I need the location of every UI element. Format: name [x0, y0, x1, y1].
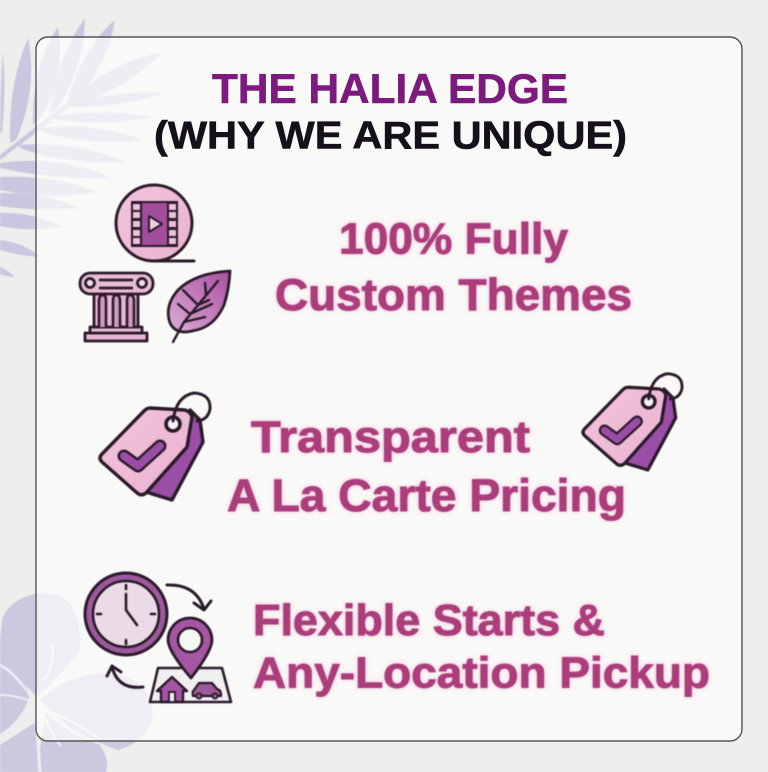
text: flexible starts: Any-Location Pickup	[253, 650, 710, 698]
text: flexible starts	[253, 596, 710, 698]
arrow: map to clock	[107, 666, 143, 687]
palm leaf decoration	[0, 18, 165, 277]
icon: price tag left	[100, 393, 210, 500]
heading: brand: THE HALIA EDGE	[212, 65, 568, 112]
arrow: clock to pin	[167, 585, 211, 610]
heading: subtitle: (WHY WE ARE UNIQUE)	[154, 114, 627, 158]
film reel	[116, 185, 194, 261]
text: pricing	[227, 413, 626, 521]
icon: price tag right	[583, 374, 682, 470]
text: custom themes: 100% Fully	[339, 214, 569, 264]
map	[150, 668, 231, 702]
text: pricing: A La Carte Pricing	[227, 470, 626, 521]
clock	[85, 573, 167, 655]
leaf	[168, 271, 230, 342]
map pin	[168, 618, 212, 678]
column	[80, 273, 153, 341]
text: custom themes	[275, 214, 632, 320]
text: custom themes: Custom Themes	[275, 271, 632, 320]
icon: clock, pin and map	[85, 573, 231, 702]
icon: film, column and leaf	[80, 185, 230, 342]
text: pricing: Transparent	[251, 413, 530, 462]
title	[154, 65, 627, 158]
hibiscus flower decoration	[0, 593, 152, 772]
text: flexible starts: Flexible Starts &	[253, 596, 605, 645]
